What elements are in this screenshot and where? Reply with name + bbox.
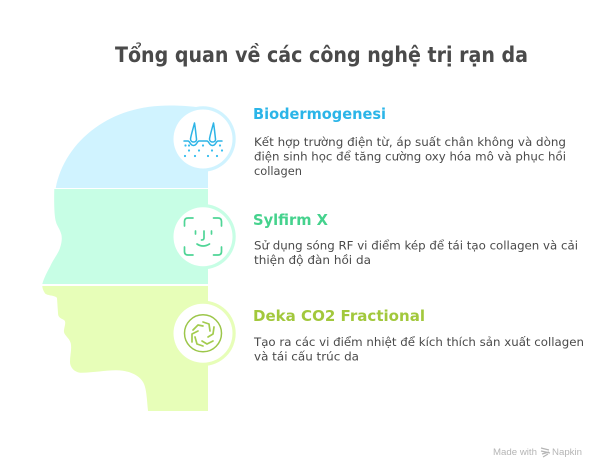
description: điện sinh học để tăng cường oxy hóa mô và phục hồi: [254, 150, 566, 164]
description: [254, 135, 566, 178]
description: collagen: [254, 164, 302, 178]
description: thiện độ đàn hồi da: [254, 253, 371, 267]
panel: Sylfirm X: [42, 189, 578, 284]
description: [254, 238, 578, 267]
heading: Deka CO2 Fractional: [253, 307, 425, 325]
icon: face scan: [170, 204, 236, 269]
description: Sử dụng sóng RF vi điểm kép để tái tạo collagen và cải: [254, 238, 578, 252]
footer: Made with Napkin: Napkin: [552, 447, 582, 457]
description: Kết hợp trường điện từ, áp suất chân không và dòng: [254, 135, 566, 149]
head section: forehead and nose: [42, 189, 208, 284]
description: Tạo ra các vi điểm nhiệt để kích thích sản xuất collagen: [253, 335, 584, 349]
head section: mouth chin and neck: [42, 286, 208, 411]
icon: Napkin logo: [541, 448, 550, 457]
heading: Sylfirm X: [253, 211, 328, 229]
title: Tổng quan về các công nghệ trị rạn da: [115, 42, 528, 67]
footer: Made with Napkin: [493, 447, 582, 457]
head section: top of head: [56, 106, 208, 188]
icon: swirl in circle: [170, 301, 236, 366]
icon: skin with hair follicles: [170, 106, 236, 172]
description: và tái cấu trúc da: [254, 350, 359, 364]
panel: Biodermogenesi: [56, 105, 566, 188]
panel: Deka CO2 Fractional: [42, 286, 584, 411]
heading: Biodermogenesi: [253, 105, 386, 123]
description: [253, 335, 584, 364]
footer: Made with Napkin: Made with: [493, 447, 537, 457]
